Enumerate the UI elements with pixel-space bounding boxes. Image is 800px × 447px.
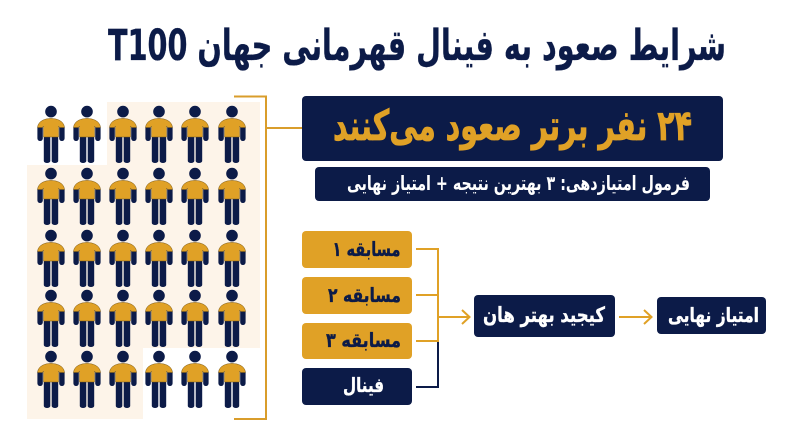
race 2 box: مسابقه ۲ (328, 283, 401, 307)
bracket connecting people to headline (234, 96, 302, 419)
headline box: ۲۴ نفر برتر صعود می‌کنند (333, 101, 692, 151)
final box (302, 368, 412, 405)
formula box: فرمول امتیازدهی: ۳ بهترین نتیجه + امتیاز نهایی (347, 171, 690, 195)
arrow to final score (619, 310, 652, 324)
connector: races to best-scores arrow (416, 249, 470, 341)
final score box (657, 297, 766, 334)
best scores box (474, 295, 615, 337)
connector: final to bracket (416, 341, 438, 387)
race 1 box: مسابقه ۱ (332, 237, 400, 261)
race 2 box (302, 277, 412, 314)
race 1 box (302, 231, 412, 268)
final box: فینال (343, 373, 384, 397)
best scores box: کیجید بهتر هان (483, 303, 606, 327)
people grid: 30 players (37, 106, 246, 408)
formula box (315, 167, 710, 201)
headline box (302, 96, 723, 161)
panel: highlighted top 24 background (27, 102, 260, 419)
race 3 box (302, 323, 412, 359)
race 3 box: مسابقه ۳ (326, 328, 401, 352)
final score box: امتیاز نهایی (668, 303, 759, 327)
